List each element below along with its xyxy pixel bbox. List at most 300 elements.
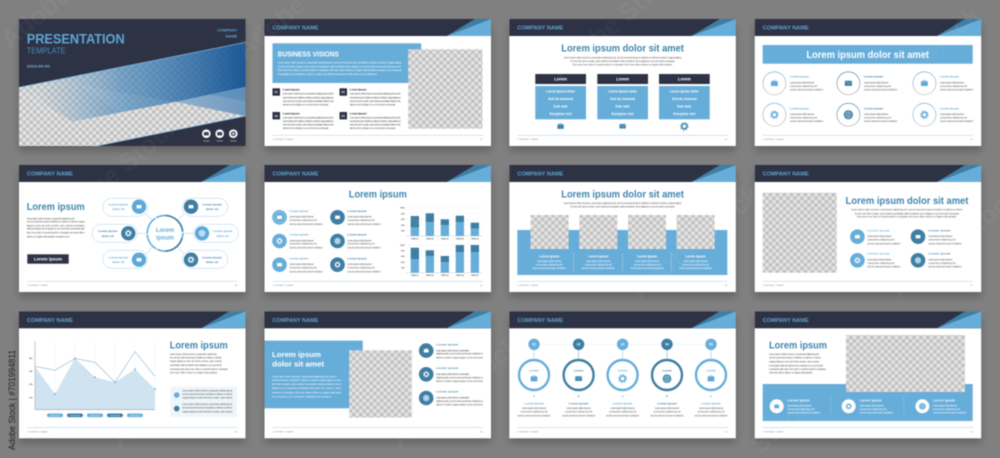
intro text: Ut enim ad minim veniam, quis nostrud exercitation ullamco laboris nisi ut aliquip ex ea commodo consequat. [854, 212, 960, 215]
item: mail light: consectetur adipiscing elit [867, 239, 895, 242]
caption 4 [679, 254, 712, 270]
step 05: Lorem ipsum dolor sit amet [699, 407, 723, 410]
item 04: Lorem Ipsum [350, 111, 367, 115]
header bar [755, 19, 981, 36]
step 01: sed do eiusmod tempor incididunt [517, 414, 551, 417]
icon item 3: sed do eiusmod tempor incididunt [940, 88, 973, 91]
item 03: Lorem ipsum dolor sit amet, consectetur adipiscing elit, sed do [283, 116, 334, 119]
body text: exercitation ullamco laboris nisi ut aliquip ex ea commodo [170, 364, 222, 367]
header bar: COMPANY NAME [763, 26, 809, 32]
heading: Lorem ipsum [769, 339, 827, 351]
cover title: PRESENTATION [27, 31, 125, 46]
bar chart bottom: 400 [401, 261, 405, 264]
item: gear light: sed do eiusmod tempor incididunt [867, 266, 901, 269]
heading: Lorem ipsum [349, 188, 407, 200]
footer: 07 [970, 285, 973, 287]
column 2: Sed do eiusmod [610, 97, 635, 101]
panel body text: Duis aute irure dolor in reprehenderit in voluptate velit esse cillum dolore eu fugiat nulla pariatur excepteur sint occaecat. [278, 69, 402, 72]
item list: Lorem ipsum dolor sit amet [348, 263, 372, 266]
column 1: Lorem ipsum dolor [546, 90, 576, 94]
body text: Lorem ipsum dolor sit amet, consectetur adipiscing elit, [27, 217, 75, 220]
panel: six icons slide [755, 19, 981, 146]
icon item 5: Lorem ipsum dolor sit amet [864, 113, 888, 116]
icon item 3: Lorem ipsum [940, 75, 959, 79]
button [27, 254, 69, 264]
column 2: Lorem [616, 76, 629, 82]
block body text: eiusmod tempor incididunt ut labore et dolore magna aliqua ut enim [272, 379, 341, 382]
header bar: COMPANY NAME [272, 26, 319, 32]
bar chart top: 600 [401, 219, 405, 221]
pill middle-right: dolor sit [217, 234, 229, 238]
item 2: adipiscing elit, sed do eiusmod tempor incididunt ut [436, 376, 483, 379]
intro text: Ut enim ad minim veniam, quis nostrud exercitation ullamco laboris nisi ut aliquip ex ea commodo consequat. [570, 60, 675, 63]
cover photo placeholder [19, 42, 246, 146]
item: gear light: consectetur adipiscing elit [867, 262, 895, 265]
column 3: Sed do eiusmod [672, 97, 697, 101]
note box: magna aliqua ut enim ad minim veniam, quis nostrud [182, 410, 233, 413]
step 04: consectetur adipiscing elit [653, 411, 681, 414]
column 1: Lorem [554, 76, 567, 82]
icon item 5: Lorem ipsum [864, 106, 883, 110]
cover icons: Lorem [203, 140, 210, 143]
band item 3: consectetur adipiscing elit [933, 408, 960, 411]
bar chart bottom: 600 [401, 256, 405, 258]
item 04 [340, 111, 401, 130]
step 02: consectetur adipiscing elit [565, 411, 592, 414]
panel: hub diagram slide [19, 165, 246, 292]
footer: COMPANY NAME [517, 138, 539, 141]
header bar: COMPANY NAME [272, 318, 319, 324]
step 02: sed do eiusmod tempor incididunt [562, 414, 595, 417]
item list: sed do eiusmod tempor incididunt [348, 247, 381, 250]
item 02: laboris nisi ut aliquip ex ea commodo consequat. [350, 103, 396, 106]
item list: Lorem ipsum [348, 256, 367, 260]
step 03: Lorem ipsum dolor sit amet [611, 407, 635, 410]
item 03: laboris nisi ut aliquip ex ea commodo consequat. [283, 127, 329, 130]
body text: elit, sed do eiusmod tempor incididunt ut labore et dolore [170, 356, 222, 359]
cover company name: COMPANY [217, 28, 238, 32]
footer: COMPANY NAME [517, 284, 539, 287]
icon item 3: Lorem ipsum dolor sit amet [940, 82, 964, 85]
item 02: Lorem ipsum dolor sit amet, consectetur adipiscing elit, sed do [350, 93, 401, 96]
step 02: Lorem ipsum [569, 401, 589, 405]
caption 3 [630, 254, 664, 270]
note box: magna aliqua ut enim ad minim veniam, quis nostrud [182, 397, 233, 400]
item: mail light: Lorem ipsum [867, 228, 890, 232]
item 02: eiusmod tempor incididunt ut labore et dolore magna aliqua ut [350, 96, 401, 99]
column 2: Lorem ipsum dolor [608, 90, 638, 94]
item 01: Lorem Ipsum [283, 88, 300, 92]
bar chart bottom: ITEM 02 [426, 275, 434, 277]
item 1 [419, 342, 483, 359]
header bar: COMPANY NAME [272, 172, 319, 178]
item list: Lorem ipsum [290, 256, 309, 260]
heading: Lorem ipsum dolor sit amet [561, 43, 684, 55]
bar chart bottom: 1000 [400, 245, 405, 247]
item 2: Lorem ipsum dolor sit amet, consectetur [436, 373, 469, 376]
body text: magna aliqua ut enim ad minim veniam, quis nostrud [769, 360, 820, 363]
step 04: Lorem ipsum dolor sit amet [655, 407, 679, 410]
block heading: dolor sit amet [272, 359, 324, 368]
body text: magna aliqua ut enim ad minim veniam, quis nostrud [170, 360, 222, 363]
body text [170, 353, 228, 374]
icon item 3: consectetur adipiscing elit [940, 85, 967, 88]
pill bottom-left [103, 250, 148, 268]
item list: Lorem ipsum dolor sit amet [290, 263, 314, 266]
pill middle-right [193, 224, 238, 242]
body text: velit esse cillum dolore eu fugiat nulla pariatur. [769, 372, 813, 375]
intro text [851, 209, 963, 219]
item: globe dark: Lorem ipsum [928, 252, 951, 256]
item 04: Lorem ipsum dolor sit amet, consectetur adipiscing elit, sed do [350, 116, 401, 119]
watermark: Adobe Stock [45, 109, 186, 235]
pill bottom-left: Lorem ipsum [109, 255, 128, 259]
column 3: Duis aute [677, 104, 692, 108]
footer: 11 [970, 431, 973, 433]
blue block [264, 341, 363, 408]
step 02: Lorem [574, 368, 584, 372]
footer: COMPANY NAME [517, 430, 539, 433]
panel: image and band slide [755, 311, 981, 438]
footer: 03 [970, 139, 973, 141]
panel: image with icons slide [755, 165, 981, 292]
footer: COMPANY NAME [27, 430, 49, 433]
item 01: enim ad minim veniam, quis nostrud exercitation ullamco nisi [283, 100, 334, 103]
item: mail dark: Lorem ipsum [928, 228, 951, 232]
band item 3: Lorem ipsum [933, 398, 955, 402]
step 03: Lorem [618, 368, 628, 372]
caption 1 [533, 254, 566, 270]
icon item 6 [913, 103, 973, 126]
step 03: sed do eiusmod tempor incididunt [606, 414, 639, 417]
note box: sed do eiusmod tempor incididunt ut labore et dolore [182, 393, 233, 396]
body text: sed do eiusmod tempor incididunt ut labore et dolore magna [27, 221, 85, 224]
footer: 10 [725, 431, 728, 433]
panel: bar chart slide [264, 165, 491, 292]
body text: consequat duis aute irure dolor in reprehenderit in voluptate [769, 368, 827, 371]
column 2 [597, 74, 648, 129]
panel body text: Cupidatat non proident, sunt in culpa qui officia deserunt mollit anim id est laborum. [278, 73, 378, 76]
item list: Lorem ipsum dolor sit amet [290, 216, 314, 219]
central hub ring: ipsum [156, 236, 174, 242]
panel: cover slide [19, 19, 246, 146]
step 03 [606, 339, 639, 417]
body text: Lorem ipsum dolor sit amet, consectetur adipiscing [170, 353, 217, 356]
icon item 5: consectetur adipiscing elit [864, 117, 891, 120]
item 3: adipiscing elit, sed do eiusmod tempor incididunt ut [436, 400, 483, 403]
item 3: Lorem ipsum [436, 390, 458, 394]
footer [272, 281, 483, 287]
item 03: 03 [275, 114, 278, 118]
item list: consectetur adipiscing elit [290, 243, 317, 246]
body text: Lorem ipsum dolor sit amet, consectetur adipiscing elit, [769, 353, 819, 356]
intro text: Duis aute irure dolor in reprehenderit in voluptate velit esse cillum dolore eu fugiat nulla pariatur. [857, 216, 957, 219]
band item 2: Lorem ipsum dolor sit amet [860, 404, 884, 407]
block body text: tur excepteur sint occaecat cupidatat non proident. [272, 396, 332, 399]
step 04: Lorem [662, 368, 672, 372]
body text: ullamco laboris nisi ut aliquip ex ea commodo consequat duis [27, 228, 86, 231]
chart legend pills: Lorem ipsum [110, 415, 120, 417]
step 01: Lorem [529, 368, 539, 372]
item list: Lorem ipsum [348, 209, 367, 213]
heading: Lorem ipsum dolor sit amet [846, 195, 969, 207]
item 04: laboris nisi ut aliquip ex ea commodo consequat. [350, 127, 396, 130]
intro text: Lorem ipsum dolor sit amet, consectetur adipiscing elit, sed do eiusmod tempor incididunt ut labore et dolore. [851, 209, 963, 212]
central hub ring: Lorem [156, 228, 174, 234]
footer [27, 428, 238, 433]
header bar: COMPANY NAME [27, 172, 74, 178]
area chart: 400 [29, 357, 33, 360]
footer: 04 [235, 285, 238, 287]
item list: Lorem ipsum [290, 233, 309, 237]
bar chart top: ITEM 02 [426, 238, 434, 240]
image placeholder [846, 335, 965, 392]
item list: Lorem ipsum [290, 209, 309, 213]
pill middle-right: Lorem ipsum [213, 229, 233, 233]
item: globe dark: Lorem ipsum dolor sit amet [928, 258, 953, 261]
item 3 [419, 390, 483, 407]
pill top-left [103, 198, 148, 216]
icon item 4 [763, 103, 823, 126]
header bar: COMPANY NAME [517, 318, 564, 324]
intro text [564, 56, 682, 67]
chart legend pills: Lorem ipsum [90, 415, 100, 417]
header bar [509, 165, 736, 182]
step 05: consectetur adipiscing elit [697, 411, 725, 414]
panel: three columns slide [509, 19, 736, 146]
block body text [272, 376, 342, 399]
band item 2 [842, 398, 893, 415]
pill bottom-right: dolor sit [206, 260, 218, 264]
item: globe dark: sed do eiusmod tempor incididunt [928, 266, 962, 269]
heading banner: Lorem ipsum dolor sit amet [806, 49, 929, 61]
note box: Lorem ipsum dolor sit amet, consectetur adipiscing elit [182, 389, 233, 392]
item 01: eiusmod tempor incididunt ut labore et dolore magna aliqua ut [283, 96, 334, 99]
body text: sed do eiusmod tempor incididunt ut labore et dolore [769, 357, 822, 360]
caption 3: Lorem ipsum [637, 254, 657, 258]
chart legend pills: Lorem ipsum [130, 415, 140, 417]
footer [763, 428, 973, 433]
pill top-right: dolor sit [206, 207, 218, 211]
block body text: henderit in voluptate velit esse cillum dolore eu fugiat nulla paria [272, 391, 342, 394]
header bar: COMPANY NAME [517, 26, 564, 32]
icon item 2: sed do eiusmod tempor incididunt [864, 88, 897, 91]
caption 2: Lorem ipsum dolor sit amet [586, 260, 611, 263]
panel: business visions slide [264, 19, 491, 146]
footer: 01 [480, 139, 483, 141]
footer [517, 428, 728, 433]
header bar [509, 311, 736, 328]
column 2: Duis aute [615, 104, 630, 108]
icon item 4: Lorem ipsum dolor sit amet [790, 113, 814, 116]
footer: COMPANY NAME [272, 284, 294, 287]
item list: sed do eiusmod tempor incididunt [348, 270, 381, 273]
bar chart top: ITEM 01 [411, 238, 419, 240]
note box: sed do eiusmod tempor incididunt ut labore et dolore [182, 407, 233, 410]
band item 3: Lorem ipsum dolor sit amet [933, 404, 957, 407]
intro text: Ut enim ad minim veniam, quis nostrud exercitation ullamco laboris nisi ut aliquip ex ea commodo consequat. [570, 206, 675, 209]
bar chart top: 1000 [400, 208, 405, 210]
block body text: ad minim veniam, quis nostrud exercitation ullamco laboris nisi ut [272, 383, 341, 386]
column 1: Excepteur sint [550, 112, 573, 116]
footer [517, 281, 728, 287]
caption 3: Lorem ipsum dolor sit amet [635, 260, 659, 263]
pill middle-left: dolor sit [102, 234, 114, 238]
step 01 [518, 339, 551, 417]
cover icons: Lorem [230, 140, 237, 143]
header bar [264, 311, 491, 328]
bar chart top: ITEM 04 [456, 237, 464, 240]
image placeholders [531, 215, 715, 249]
item 03 [272, 111, 334, 130]
block body text: aliquip ex ea commodo consequat duis aute irure dolor in repre [272, 387, 342, 390]
bar chart bottom: ITEM 03 [441, 275, 449, 277]
stock id label: Adobe Stock | #701994811 [7, 350, 17, 450]
column 1: Sed do eiusmod [548, 97, 573, 101]
bar chart bottom: ITEM 01 [411, 275, 419, 277]
item 03: Lorem Ipsum [283, 111, 300, 115]
step 05: sed do eiusmod tempor incididunt [694, 414, 728, 417]
image placeholder [408, 49, 482, 129]
footer: 06 [725, 285, 728, 287]
footer: COMPANY NAME [763, 284, 784, 287]
bar chart top: ITEM 03 [441, 238, 449, 240]
step 05: 05 [709, 342, 713, 346]
intro text [564, 202, 682, 209]
band item 1: Lorem ipsum [787, 398, 810, 402]
item list [272, 209, 381, 273]
band item 3: sed do eiusmod tempor incididunt [933, 412, 966, 415]
pill bottom-right [182, 250, 228, 268]
header bar [755, 165, 981, 182]
item list: consectetur adipiscing elit [348, 266, 375, 269]
item: mail light [850, 228, 901, 245]
body text [769, 353, 827, 375]
heading: Lorem ipsum [170, 339, 228, 351]
footer [763, 135, 973, 141]
area chart [29, 341, 156, 410]
item 1: adipiscing elit, sed do eiusmod tempor incididunt ut [436, 353, 483, 356]
band item 2: consectetur adipiscing elit [860, 408, 887, 411]
item 04: enim ad minim veniam, quis nostrud exercitation ullamco nisi [350, 124, 401, 127]
item list: consectetur adipiscing elit [348, 243, 375, 246]
footer [272, 428, 483, 433]
cover icons [202, 129, 238, 143]
item: mail dark [911, 228, 962, 245]
footer: 09 [480, 431, 483, 433]
column 2: Excepteur sint [612, 112, 635, 116]
icon item 2: Lorem ipsum dolor sit amet [864, 82, 888, 85]
caption 4: Lorem ipsum dolor sit amet [684, 260, 708, 263]
caption 2: Lorem ipsum [588, 254, 608, 258]
footer [272, 135, 483, 141]
bar chart bottom: ITEM 04 [456, 274, 464, 277]
icon item 6: Lorem ipsum dolor sit amet [940, 113, 964, 116]
footer: COMPANY NAME [27, 284, 49, 287]
bar chart top: 400 [401, 224, 405, 227]
item 04: 04 [342, 114, 345, 118]
caption 3: consectetur adipiscing elit [633, 263, 661, 266]
item 1: labore et dolore magna aliqua ut enim ad minim [436, 356, 483, 359]
body text: consequat duis aute irure dolor in reprehenderit in voluptate [170, 368, 228, 371]
item list: Lorem ipsum dolor sit amet [348, 216, 372, 219]
timeline line [534, 343, 711, 345]
item 2: Lorem ipsum [436, 366, 458, 370]
panel: four images slide [509, 165, 736, 292]
heading: Lorem ipsum [27, 201, 85, 213]
caption 3: sed do eiusmod tempor incididunt [630, 267, 664, 270]
step 03: Lorem ipsum [613, 401, 633, 405]
footer: 05 [480, 285, 483, 287]
item 01 [272, 88, 334, 106]
central hub ring [147, 216, 183, 251]
heading banner [763, 45, 973, 64]
header bar [264, 165, 491, 182]
item 2 [419, 366, 483, 383]
item: globe dark [911, 252, 962, 269]
footer: 08 [235, 431, 238, 433]
item: mail dark: Lorem ipsum dolor sit amet [928, 235, 953, 238]
column 3 [659, 74, 710, 130]
icon item 4: Lorem ipsum [790, 106, 809, 110]
caption 2: consectetur adipiscing elit [585, 263, 612, 266]
item: gear light [850, 252, 901, 269]
step 02 [562, 339, 595, 417]
band item 3 [915, 398, 966, 415]
watermark: Adobe Stock [105, 329, 246, 455]
pill top-left: Lorem ipsum [109, 202, 128, 206]
item 02: 02 [342, 90, 345, 94]
chart legend pills [47, 414, 143, 417]
step 03: 03 [621, 342, 625, 346]
band separators [831, 395, 904, 414]
header bar: COMPANY NAME [763, 172, 809, 178]
item 2: labore et dolore magna aliqua ut enim ad minim [436, 380, 483, 383]
icon item 1 [763, 72, 823, 95]
item list: Lorem ipsum dolor sit amet [290, 239, 314, 242]
caption 4: sed do eiusmod tempor incididunt [679, 267, 712, 270]
caption 1: Lorem ipsum dolor sit amet [537, 260, 562, 263]
panel: timeline slide [509, 311, 736, 438]
item 1: Lorem ipsum dolor sit amet, consectetur [436, 349, 469, 352]
area chart: 100 [29, 397, 33, 399]
cover company name: NAME [226, 33, 238, 38]
item list: Lorem ipsum [348, 233, 367, 237]
item: gear light: Lorem ipsum [867, 252, 890, 256]
item: mail light: Lorem ipsum dolor sit amet [867, 235, 892, 238]
bar chart bottom: 800 [401, 250, 405, 252]
item list: consectetur adipiscing elit [348, 219, 375, 222]
item 04: eiusmod tempor incididunt ut labore et dolore magna aliqua ut [350, 120, 401, 123]
footer: 02 [725, 139, 728, 141]
item list: sed do eiusmod tempor incididunt [348, 223, 381, 226]
bar chart top: 200 [401, 230, 405, 232]
icon item 5 [837, 103, 897, 126]
step 02: Lorem ipsum dolor sit amet [567, 407, 591, 410]
step 01: Lorem ipsum [524, 401, 544, 405]
step 02: 02 [577, 342, 581, 346]
chart legend pills: Lorem ipsum [50, 415, 60, 417]
watermark: Adobe Stock [625, 179, 766, 305]
item list: consectetur adipiscing elit [290, 219, 317, 222]
item 01: laboris nisi ut aliquip ex ea commodo consequat. [283, 103, 329, 106]
body text: aliqua ut enim ad minim veniam, quis nostrud exercitation [27, 224, 85, 227]
pill middle-left: Lorem ipsum [98, 229, 118, 233]
body text: exercitation ullamco laboris nisi ut aliquip ex ea commodo [769, 364, 824, 367]
bar chart bottom [400, 245, 482, 277]
footer [27, 281, 238, 287]
blue text panel [272, 43, 421, 83]
